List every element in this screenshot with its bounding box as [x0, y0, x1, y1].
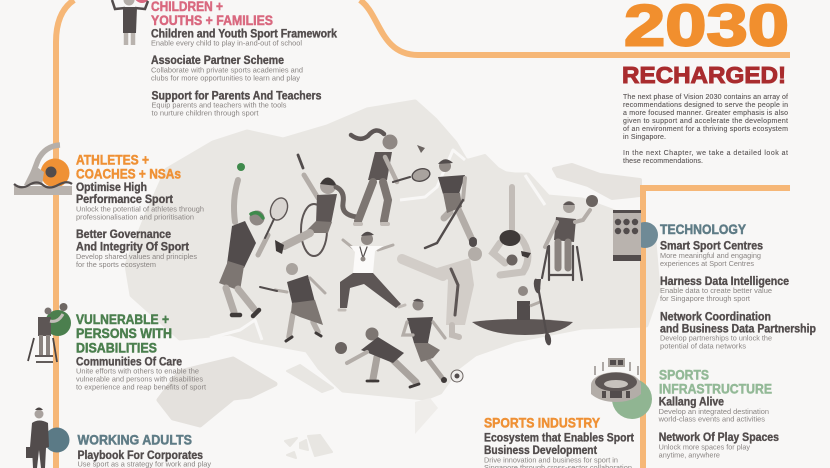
- item: high performance: professionalisation and prioritisation: [76, 214, 194, 221]
- item: framework: Enable every child to play in-and-out of school: [151, 40, 302, 48]
- intro text block: a more focused manner. Greater emphasis is also: [623, 110, 788, 117]
- item: high performance: Unlock the potential of athletes through: [76, 206, 204, 213]
- item: play spaces: Unlock more spaces for play: [659, 444, 751, 451]
- item: communities of care: vulnerable and persons with disabilities: [76, 377, 204, 384]
- panel: sports infrastructure: [591, 358, 779, 459]
- intro text block: The next phase of Vision 2030 contains an array of: [623, 94, 788, 101]
- item: governance: [76, 229, 198, 269]
- illustration: tennis player with ponytail: [275, 155, 357, 256]
- item: associate partner: clubs for more opportunities to learn and play: [151, 76, 301, 82]
- heading: SPORTS INDUSTRY: [484, 416, 600, 431]
- item: ecosystem: [484, 433, 634, 468]
- item: parents and teachers: Equip parents and teachers with the tools: [152, 102, 287, 110]
- illustration: tennis server: [219, 163, 291, 316]
- heading: COACHES + NSAs: [76, 166, 181, 182]
- heading: YOUTHS + FAMILIES: [151, 13, 273, 28]
- item: high performance: Optimise High: [76, 182, 147, 194]
- item: governance: for the sports ecosystem: [76, 262, 156, 269]
- item: high performance: [76, 182, 204, 221]
- item: playbook: Playbook For Corporates: [78, 450, 203, 462]
- item: network coordination: and Business Data Partnership: [660, 324, 816, 336]
- item: ecosystem: Drive innovation and business for sport in: [484, 457, 618, 464]
- panel: technology: [613, 210, 816, 351]
- icon: swimmer: [14, 145, 72, 195]
- illustration: wheelchair basketball player: [536, 195, 598, 290]
- heading: [76, 152, 181, 182]
- orange route line: right column: [643, 188, 790, 468]
- item: network coordination: Develop partnerships to unlock the: [660, 336, 772, 343]
- illustration: volleyball player: [335, 328, 419, 387]
- heading: ATHLETES +: [76, 152, 149, 168]
- heading: VULNERABLE +: [76, 312, 169, 327]
- item: play spaces: anytime, anywhere: [659, 452, 720, 459]
- title: recharged: RECHARGED!: [622, 62, 786, 88]
- heading: [659, 368, 772, 396]
- item: network coordination: Network Coordination: [660, 311, 771, 323]
- intro text block: In the next Chapter, we take a detailed look at: [623, 150, 788, 157]
- icon: tablet: [613, 210, 641, 261]
- illustration: frisbee player: [260, 263, 325, 341]
- orange route line: top right: [360, 0, 790, 55]
- heading: [76, 312, 172, 355]
- illustration: gymnast: [493, 187, 531, 275]
- item: governance: And Integrity Of Sport: [76, 242, 189, 254]
- item: governance: Develop shared values and principles: [76, 254, 198, 261]
- panel: athletes: [14, 145, 204, 269]
- panel: vulnerable persons: [28, 303, 206, 392]
- item: data intelligence: Harness Data Intelligence: [660, 276, 789, 288]
- panel: children, youths and families: [112, 0, 338, 118]
- intro text block: of an environment for a thriving sports ecosystem: [623, 126, 788, 133]
- heading: INFRASTRUCTURE: [659, 381, 772, 396]
- icon: blue circle: [632, 222, 658, 248]
- illustration: kayaker: [472, 278, 573, 346]
- item: smart sport centres: Smart Sport Centres: [660, 241, 763, 253]
- item: associate partner: Associate Partner Scheme: [151, 55, 284, 67]
- icon: green circle: [612, 379, 652, 419]
- item: kallang alive: world-class events and activities: [658, 417, 766, 424]
- item: ecosystem: Ecosystem that Enables Sport: [484, 433, 634, 445]
- item: associate partner: [151, 55, 303, 82]
- item: data intelligence: Enable data to create better value: [660, 288, 772, 295]
- panel: sports industry: [484, 416, 634, 468]
- heading: [151, 0, 273, 28]
- item: kallang alive: Develop an integrated destination: [659, 409, 769, 416]
- item: smart sport centres: More meaningful and engaging: [660, 253, 761, 260]
- heading: DISABILITIES: [76, 340, 157, 355]
- item: network coordination: potential of data networks: [660, 344, 747, 351]
- heading: WORKING ADULTS: [78, 432, 192, 447]
- item: parents and teachers: [152, 91, 322, 118]
- item: ecosystem: Business Development: [484, 445, 597, 457]
- item: parents and teachers: to nurture children through sport: [152, 110, 259, 118]
- item: communities of care: to experience and reap benefits of sport: [76, 385, 206, 392]
- item: kallang alive: [658, 397, 769, 424]
- item: kallang alive: Kallang Alive: [659, 397, 724, 409]
- item: communities of care: Communities Of Care: [76, 356, 182, 368]
- illustration: hockey player: [425, 159, 477, 248]
- item: parents and teachers: Support for Parents And Teachers: [152, 91, 322, 103]
- item: play spaces: [659, 432, 779, 459]
- intro text block: recommendations designed to serve the people in: [623, 102, 788, 109]
- item: smart sport centres: [660, 241, 763, 268]
- heading: TECHNOLOGY: [660, 222, 746, 237]
- item: high performance: Performance Sport: [76, 194, 173, 206]
- map of Singapore: [127, 102, 658, 458]
- item: framework: Children and Youth Sport Framework: [151, 28, 338, 40]
- illustration: karate kicker: [402, 239, 482, 337]
- intro text block: given to support and accelerate the development: [623, 118, 788, 125]
- item: associate partner: Collaborate with private sports academies and: [151, 68, 303, 74]
- item: communities of care: Unite efforts with others to enable the: [76, 369, 199, 376]
- icon: business person: [26, 408, 70, 468]
- intro text block: in Singapore.: [623, 134, 666, 141]
- icon: stadium: [591, 358, 641, 402]
- orange route line: left and top: [56, 0, 74, 468]
- item: governance: Better Governance: [76, 229, 171, 241]
- panel: working adults: [26, 408, 212, 468]
- icon: wheelchair user: [28, 303, 71, 362]
- item: play spaces: Network Of Play Spaces: [659, 432, 779, 444]
- heading: SPORTS: [659, 368, 709, 383]
- intro text block: these recommendations.: [623, 158, 703, 165]
- intro text block: [623, 94, 788, 165]
- item: network coordination: [660, 311, 816, 351]
- item: smart sport centres: experiences at Sport Centres: [660, 261, 755, 268]
- illustration: coach with medal: [339, 232, 405, 310]
- icon: child with raised arms: [112, 0, 150, 45]
- item: playbook: [78, 450, 212, 468]
- item: framework: [151, 28, 338, 48]
- item: data intelligence: [660, 276, 789, 303]
- heading: PERSONS WITH: [76, 326, 172, 341]
- illustration: badminton player: [351, 130, 431, 224]
- item: data intelligence: for Singapore through sport: [660, 296, 750, 303]
- item: communities of care: [76, 356, 206, 392]
- illustration: soccer player: [403, 299, 463, 383]
